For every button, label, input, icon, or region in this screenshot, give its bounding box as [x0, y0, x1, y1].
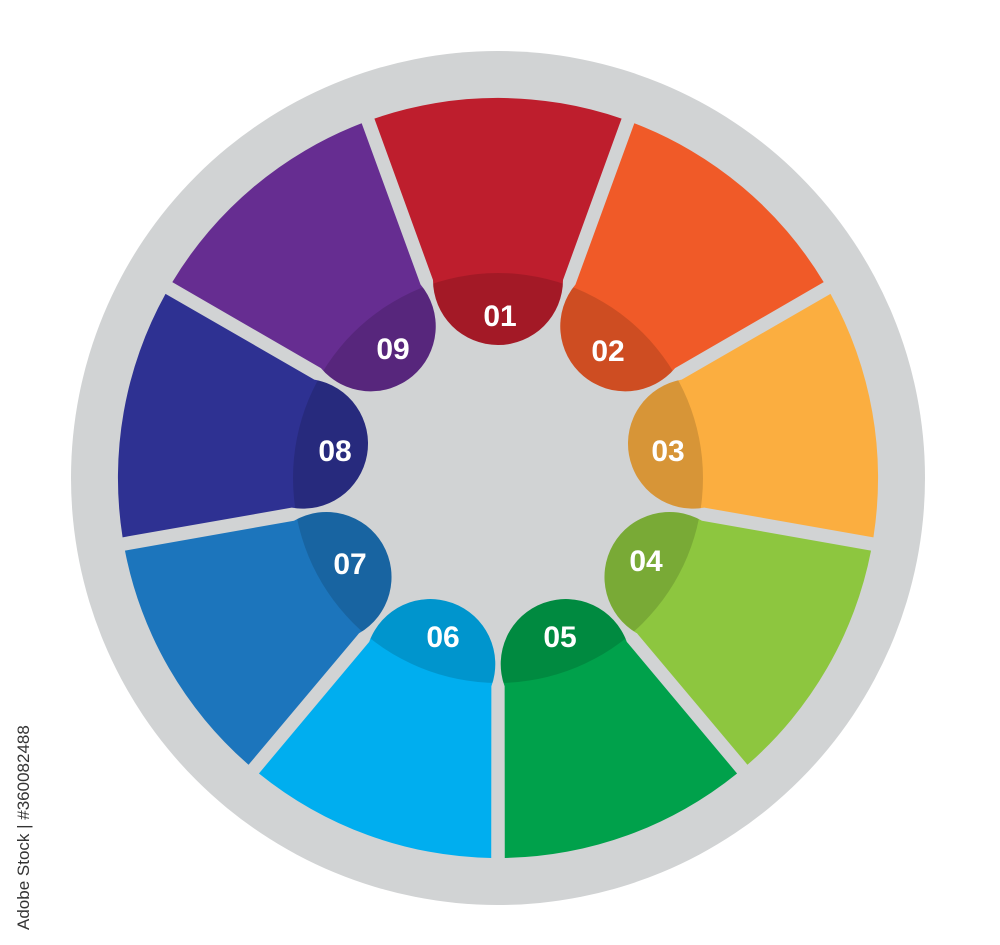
segment labels: 04 — [629, 545, 663, 578]
segment 01 — [374, 98, 622, 345]
inner darkening overlay ring — [293, 273, 703, 683]
wheel segments — [102, 98, 894, 877]
segment 06 — [252, 561, 569, 877]
segment 03 — [608, 290, 894, 577]
segment 09 — [159, 107, 507, 456]
segment 08 — [102, 290, 388, 577]
segment labels: 02 — [591, 335, 625, 368]
watermark id text: Adobe Stock | #360082488 — [14, 725, 33, 930]
segment 07 — [107, 437, 445, 775]
segment labels: 06 — [426, 621, 460, 654]
background grey circle — [71, 51, 925, 905]
segment labels: 08 — [318, 435, 352, 468]
segment labels: 07 — [333, 548, 367, 581]
segment labels: 03 — [651, 435, 685, 468]
segment 04 — [551, 437, 889, 775]
segment labels: 01 — [483, 300, 517, 333]
segment 02 — [489, 107, 837, 456]
segment labels: 05 — [543, 621, 577, 654]
segment 05 — [427, 561, 744, 877]
segment labels: 09 — [376, 333, 410, 366]
segment labels — [318, 300, 685, 654]
